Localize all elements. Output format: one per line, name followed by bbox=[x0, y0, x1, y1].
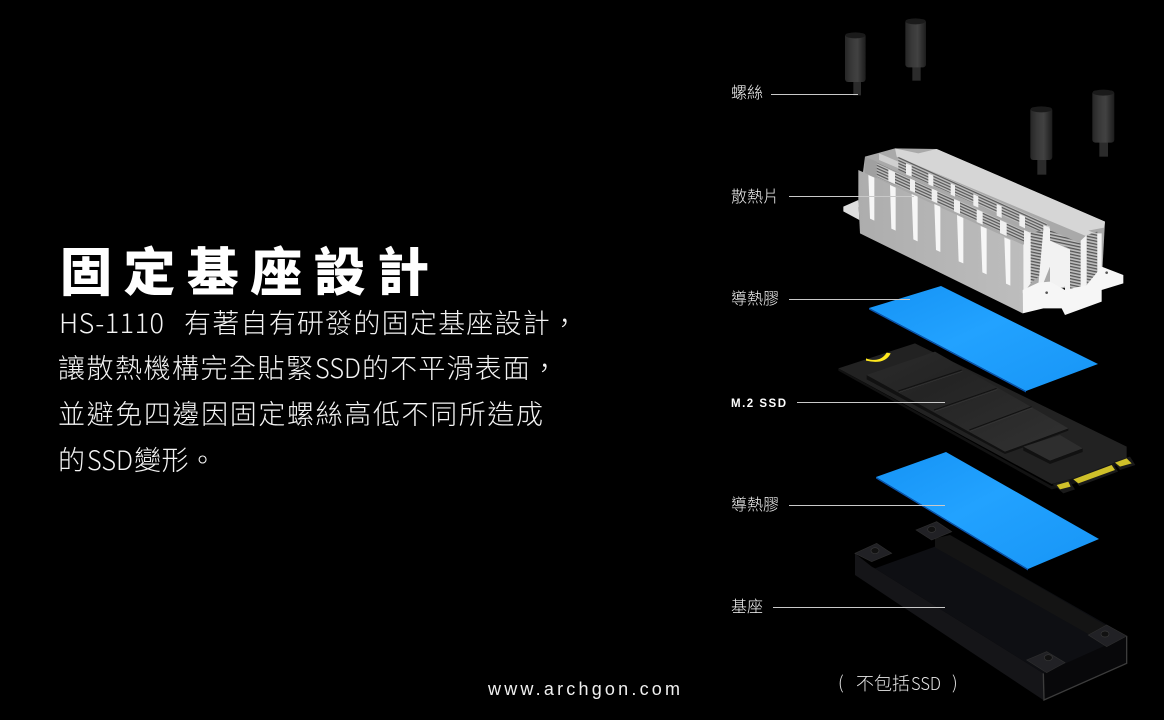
thermal pad upper bbox=[869, 286, 1098, 392]
label: upper thermal pad: 導熱膠 bbox=[731, 285, 779, 309]
body text: 讓散熱機構完全貼緊 bbox=[58, 347, 313, 386]
body text: SSD bbox=[87, 439, 133, 478]
body text: 有著自有研發的固定基座設計， bbox=[184, 302, 578, 341]
label: base: 基座 bbox=[731, 593, 763, 617]
heat sink: end white columns bbox=[1023, 228, 1102, 293]
icon: screw 1 bbox=[845, 32, 866, 95]
heat sink: end ribbed fins bbox=[1030, 230, 1043, 283]
heat sink: cross ribs front row bbox=[888, 169, 1030, 246]
heat sink: left flange bbox=[843, 200, 859, 220]
heat sink: back left fin bbox=[865, 157, 877, 178]
exploded view upper parts bbox=[843, 18, 1123, 315]
base: back wall bbox=[935, 535, 1125, 637]
SSD: contact underlay bbox=[1053, 457, 1135, 493]
body text: 的 bbox=[58, 439, 85, 478]
M.2 SSD bbox=[838, 343, 1135, 493]
note: SSD not included: 不包括 bbox=[856, 670, 910, 696]
heat sink: cross ribs back row bbox=[906, 163, 1049, 240]
note: SSD not included bbox=[838, 669, 958, 696]
SSD: yellow notch bbox=[866, 353, 891, 362]
SSD: board edge bbox=[838, 368, 1127, 489]
heat sink: back fin top bbox=[879, 153, 1050, 232]
heat sink: interior bbox=[858, 148, 1105, 293]
SSD: board bbox=[838, 343, 1127, 484]
title: 固定基座設計 bbox=[60, 231, 429, 306]
note: SSD not included: ) bbox=[952, 669, 958, 695]
SSD: gold contacts bbox=[1057, 458, 1132, 489]
base: end opening bbox=[1043, 636, 1127, 700]
base: tab holes bbox=[871, 526, 1109, 661]
label: heat sink: 散熱片 bbox=[731, 183, 779, 207]
label: screws bbox=[731, 79, 858, 103]
note: SSD not included: SSD bbox=[911, 670, 941, 696]
label: screws: 螺絲 bbox=[731, 79, 763, 103]
SSD: controller chip bbox=[1023, 447, 1083, 464]
base bracket bbox=[855, 522, 1127, 700]
base: floor bbox=[875, 535, 1127, 700]
note: SSD not included: ( bbox=[838, 669, 844, 695]
SSD: memory chips bbox=[867, 352, 1068, 452]
heat sink bbox=[843, 148, 1123, 315]
body text bbox=[58, 302, 578, 478]
website url: www.archgon.com bbox=[487, 679, 680, 699]
heat sink: ribbed bands bbox=[898, 157, 1047, 235]
heat sink: end flange bbox=[1023, 267, 1123, 315]
label: lower thermal pad: 導熱膠 bbox=[731, 491, 779, 515]
base: front wall bbox=[855, 553, 1043, 700]
body text: 並避免四邊因固定螺絲高低不同所造成 bbox=[58, 393, 543, 432]
body text: SSD bbox=[315, 347, 361, 386]
body text: HS-1110 bbox=[59, 302, 164, 341]
heat sink: flange holes bbox=[1045, 271, 1108, 294]
heat sink: front slots bbox=[868, 175, 1010, 286]
SSD: chip side bbox=[867, 375, 1068, 454]
thermal pad lower bbox=[876, 452, 1099, 570]
base: mounting tabs bbox=[855, 522, 1127, 673]
label: M.2 SSD: M.2 SSD bbox=[731, 398, 786, 410]
icon: screw 2 bbox=[905, 18, 926, 81]
body text: 變形。 bbox=[134, 439, 216, 478]
icon: screw 4 bbox=[1092, 90, 1114, 157]
heat sink: front face bbox=[858, 170, 1023, 313]
body text: 的不平滑表面， bbox=[362, 347, 558, 386]
icon: screw 3 bbox=[1030, 106, 1052, 175]
heat sink: back ridge bbox=[895, 148, 1105, 242]
